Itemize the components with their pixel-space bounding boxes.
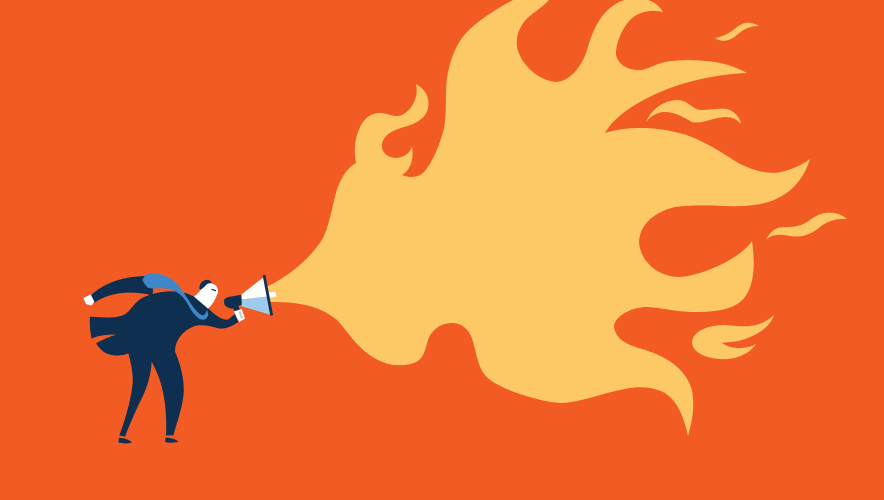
figure: fingers on the grip — [238, 311, 243, 319]
megaphone: dark handle and mouthpiece — [224, 295, 242, 312]
figure: suit jacket and legs — [90, 291, 238, 437]
megaphone: white upper cone — [241, 277, 267, 299]
flame: main blast from the megaphone — [266, 0, 810, 436]
megaphone: pale tip at the mouth — [269, 292, 276, 298]
figure: head and collar — [194, 283, 218, 309]
flame: small wisp top right — [715, 23, 759, 41]
figure: shoes — [118, 438, 179, 443]
flame: detached leaf-shaped flame — [692, 315, 774, 359]
businessman with megaphone — [83, 273, 276, 443]
megaphone: dark rim — [263, 275, 273, 316]
flame: wavy wisp right — [766, 213, 847, 240]
megaphone — [224, 275, 276, 322]
flame: wavy wisp under the upper tongue — [646, 100, 741, 124]
figure: blowing blue tie — [142, 273, 208, 320]
figure: hair — [199, 280, 212, 290]
figure: eye — [211, 289, 216, 291]
figure: back hand — [83, 294, 94, 306]
figure: far arm — [91, 276, 153, 303]
megaphone: light blue lower cone — [242, 297, 271, 315]
figure: front hand on the grip — [234, 309, 245, 322]
